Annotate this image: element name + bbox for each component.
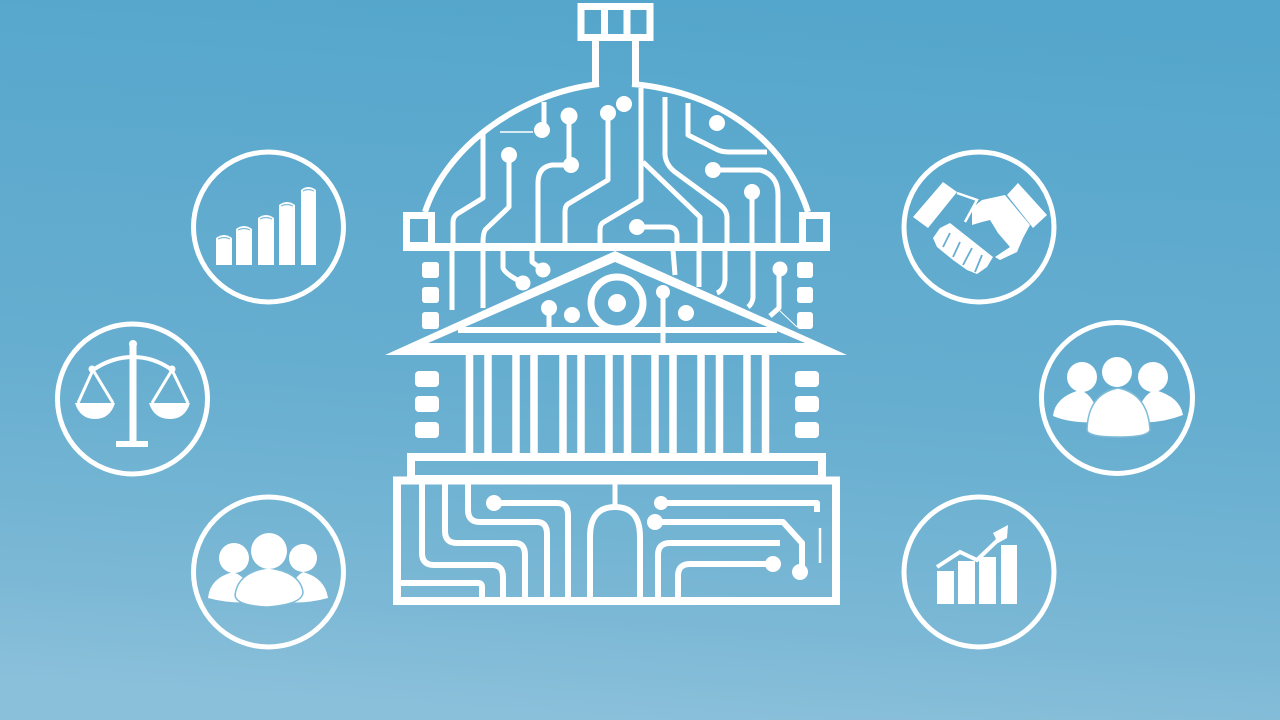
icon: scales of justice badge xyxy=(58,324,208,474)
icon: people group badge right xyxy=(1042,322,1192,474)
pediment xyxy=(385,251,847,355)
icon: growth chart badge xyxy=(904,497,1054,647)
dome circuit traces xyxy=(452,88,797,327)
lower storey xyxy=(397,480,836,601)
side windows xyxy=(415,262,819,438)
circuit nodes xyxy=(501,96,788,290)
entablature base xyxy=(411,457,822,479)
cupola lantern xyxy=(581,6,650,86)
icon: people group badge left xyxy=(194,497,344,647)
icon: handshake badge xyxy=(904,152,1054,302)
dome xyxy=(403,84,830,247)
icon: bar chart badge xyxy=(194,152,344,302)
lower circuit traces xyxy=(401,484,820,598)
colonnade xyxy=(470,354,766,455)
lower circuit nodes xyxy=(486,495,808,580)
capitol building xyxy=(385,6,847,601)
